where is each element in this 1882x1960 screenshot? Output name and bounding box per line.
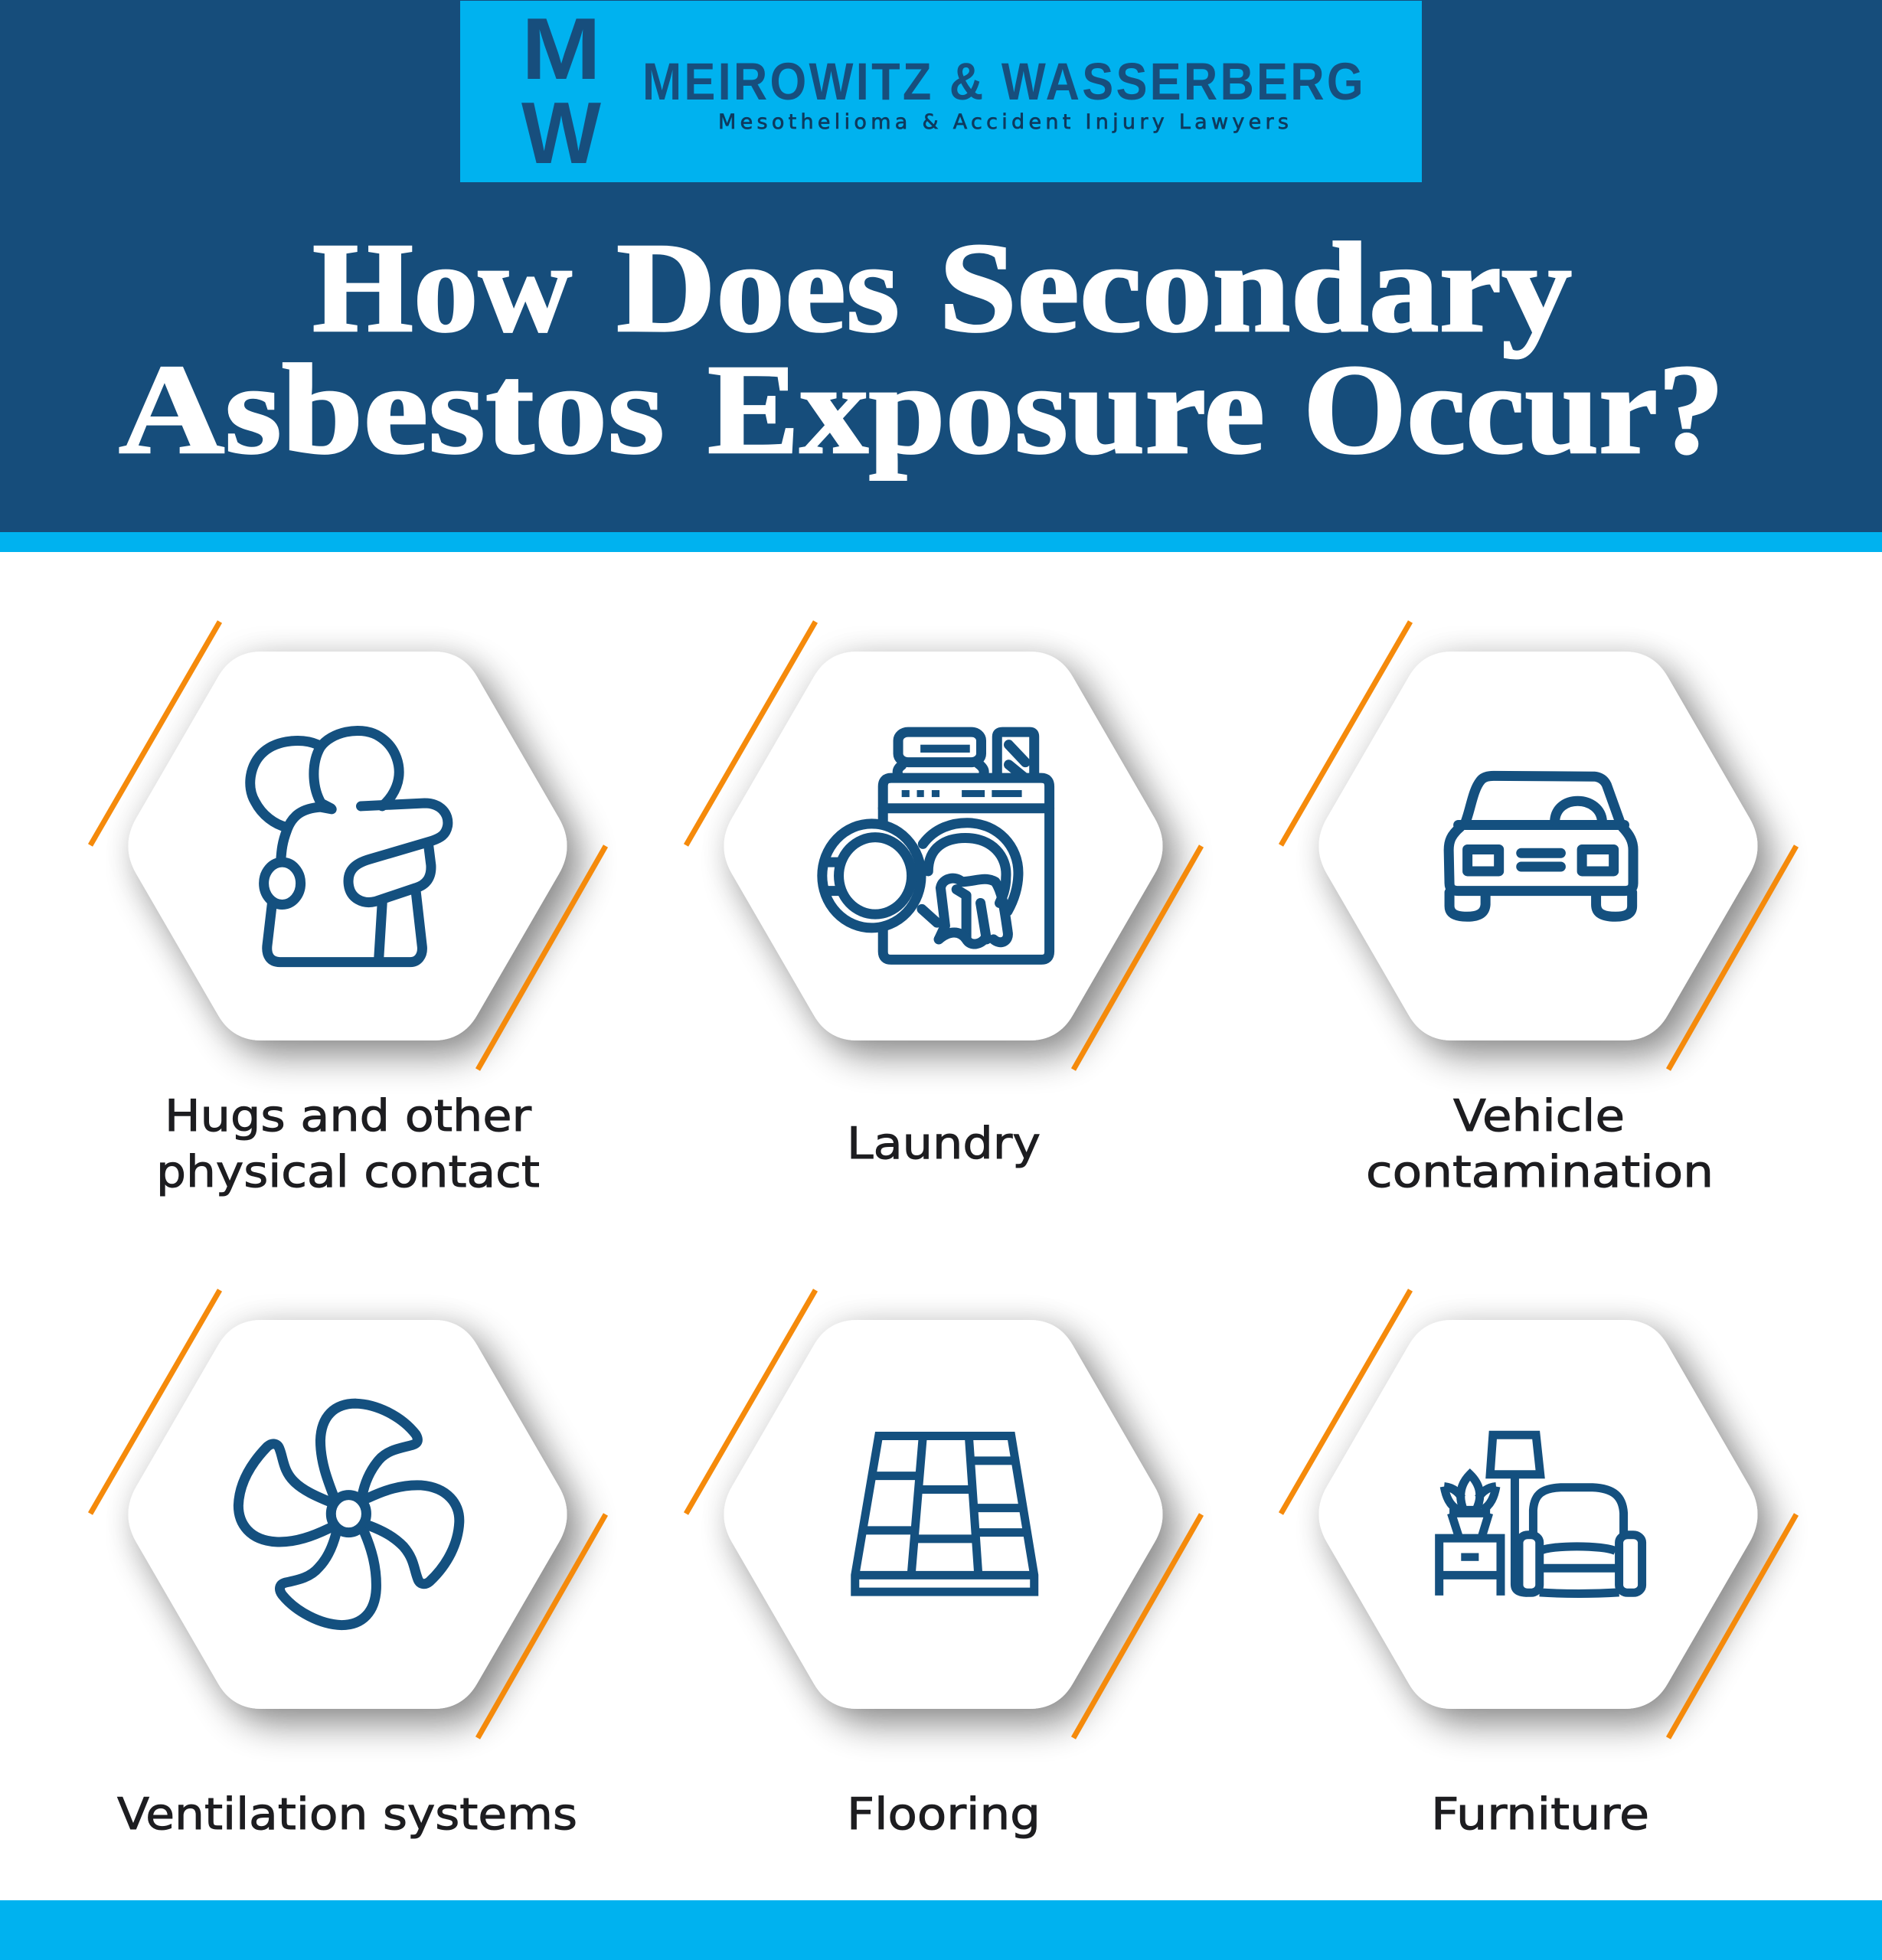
label (156, 1091, 540, 1197)
icon: washing machine (822, 732, 1050, 959)
label: Furniture (1431, 1789, 1649, 1840)
label: Ventilation systems (117, 1789, 577, 1840)
title: Secondary (939, 217, 1572, 359)
panel: laundry (686, 622, 1201, 1169)
title: Asbestos (119, 338, 665, 481)
icon: car (1449, 776, 1633, 916)
firm name: MEIROWITZ & WASSERBERG (642, 52, 1364, 111)
logo block (460, 1, 1422, 182)
label: Laundry (847, 1119, 1041, 1169)
icon: floor tiles (855, 1436, 1034, 1592)
firm tagline: Mesothelioma & Accident Injury Lawyers (718, 110, 1289, 134)
title: Does (616, 217, 900, 359)
title: How (312, 217, 572, 359)
label: Flooring (847, 1789, 1041, 1840)
panel: hugs and physical contact (90, 622, 606, 1197)
panel: furniture (1281, 1290, 1796, 1840)
title (119, 217, 1724, 481)
logo monogram M: M (521, 1, 601, 98)
label: contamination (1366, 1147, 1714, 1197)
logo monogram W: W (521, 85, 601, 182)
title: Occur? (1303, 338, 1724, 481)
title: Exposure (707, 338, 1265, 481)
panel: vehicle contamination (1281, 622, 1796, 1197)
panel: ventilation systems (90, 1290, 606, 1840)
footer band (0, 1900, 1882, 1960)
icon: hugging people (250, 730, 448, 962)
cyan header stripe (0, 532, 1882, 552)
icon: fan (238, 1403, 459, 1625)
header band (0, 0, 1882, 533)
icon: armchair, lamp and plant (1439, 1435, 1642, 1596)
panel: flooring (686, 1290, 1201, 1840)
label (1366, 1091, 1714, 1197)
label: physical contact (156, 1147, 540, 1197)
label: Vehicle (1453, 1091, 1625, 1142)
label: Hugs and other (165, 1091, 532, 1142)
